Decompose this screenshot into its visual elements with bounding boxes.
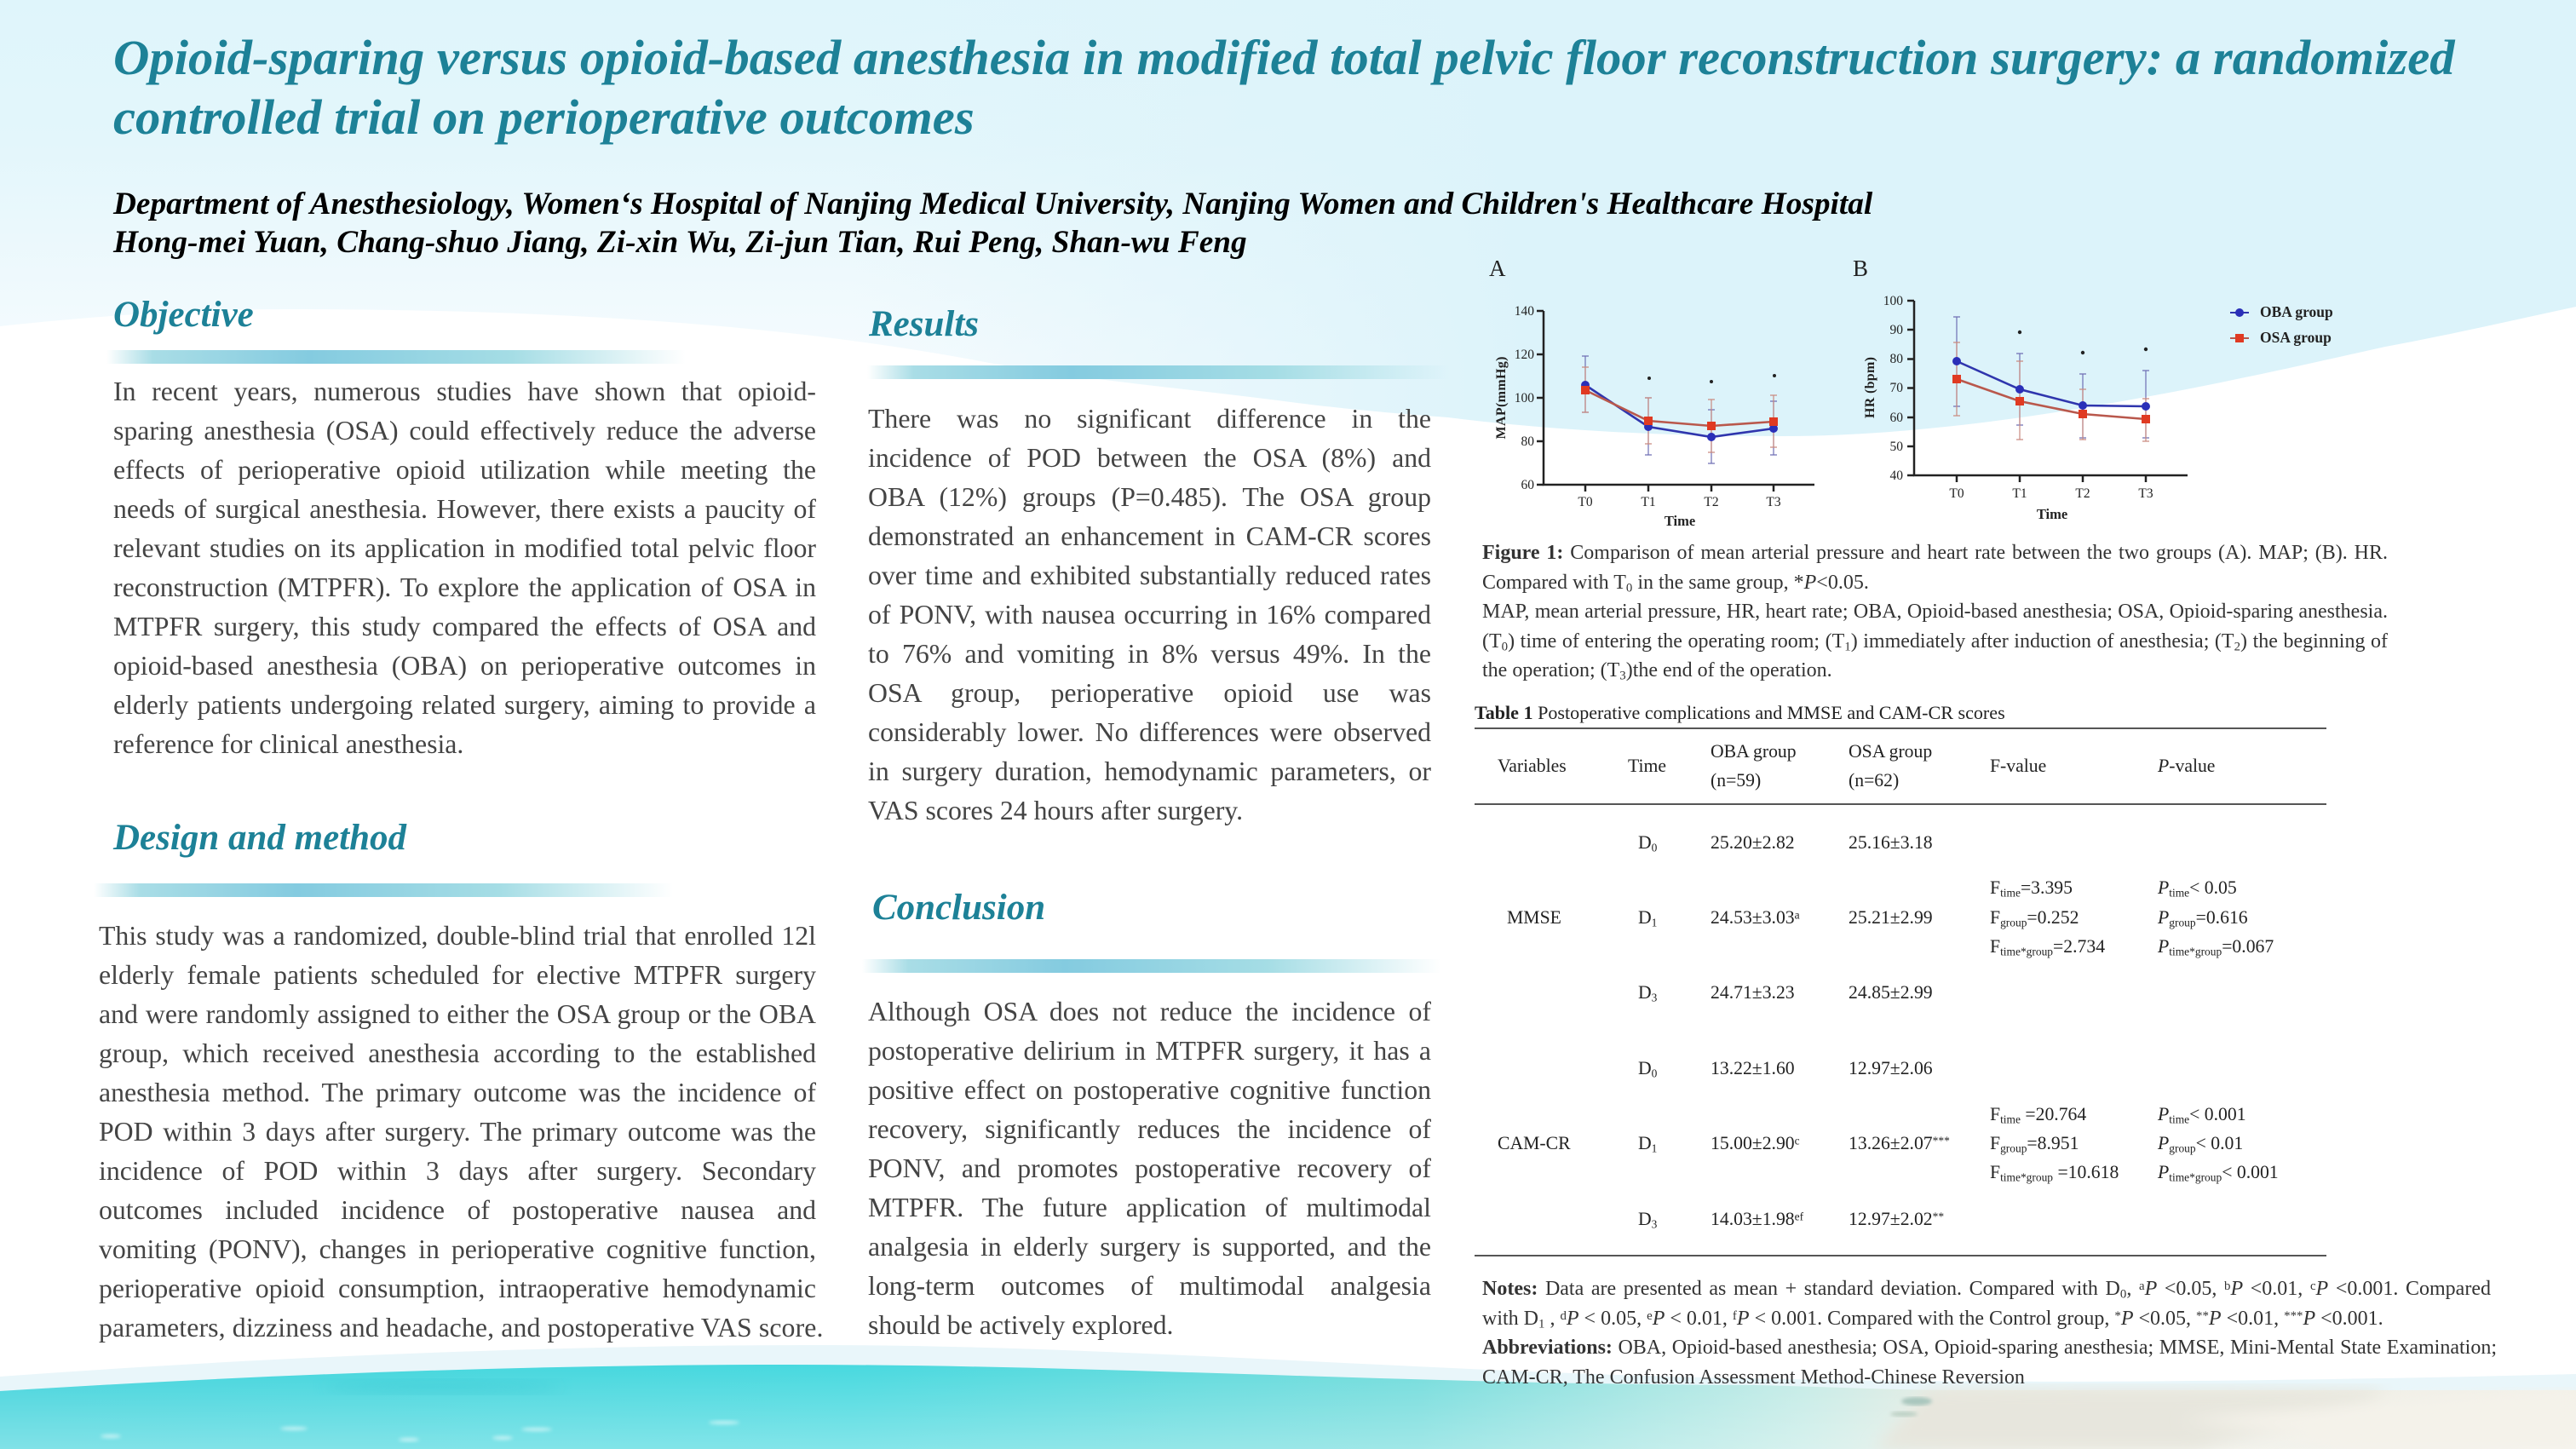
chart A: MAP: 100 bbox=[1515, 391, 1534, 405]
chart B: HR: 90 bbox=[1889, 323, 1903, 337]
table notes: Notes: Data are presented as mean + standard deviation. Compared with D0, aP <0.05, bP <0.01, cP <0.001. Compared bbox=[1482, 1278, 2491, 1302]
chart B: HR: 70 bbox=[1889, 381, 1903, 395]
authors and affiliation bbox=[112, 187, 1872, 260]
text: results: incidence of POD between the OSA (8%) and bbox=[868, 443, 1431, 473]
table 1: MMSE and CAM-CR scores: 25.20±2.82 bbox=[1711, 832, 1795, 853]
chart A: MAP: T2 bbox=[1704, 495, 1719, 509]
text: conclusion: PONV, and promotes postoperative recovery of bbox=[868, 1153, 1431, 1183]
text: conclusion: positive effect on postoperative cognitive function bbox=[868, 1075, 1431, 1105]
text: results: There was no significant difference in the bbox=[868, 404, 1431, 434]
table 1: MMSE and CAM-CR scores: 24.53±3.03a bbox=[1711, 907, 1800, 928]
figure caption: Compared with T0 in the same group, *P<0.05. bbox=[1482, 572, 1869, 595]
table 1: MMSE and CAM-CR scores: Table 1 Postoperative complications and MMSE and CAM-CR scores bbox=[1475, 702, 2005, 723]
text: design and method: POD within 3 days after surgery. The primary outcome was the bbox=[99, 1117, 816, 1147]
figure caption: Figure 1: Comparison of mean arterial pressure and heart rate between the two groups (A). MAP; (B). HR. bbox=[1482, 542, 2388, 564]
figure 1: MAP and HR line charts bbox=[1489, 256, 2333, 529]
chart A: MAP: T1 bbox=[1641, 495, 1656, 509]
chart B: HR: T1 bbox=[2012, 486, 2027, 501]
table 1: MMSE and CAM-CR scores: 12.97±2.06 bbox=[1849, 1058, 1933, 1078]
authors and affiliation: Department of Anesthesiology, Women‘s Hospital of Nanjing Medical University, Nanjing Women and Children's Healthcare Hospital bbox=[113, 187, 1872, 221]
title: Opioid-sparing versus opioid-based anesthesia in modified total pelvic floor reconstruction surgery: a randomized bbox=[113, 30, 2455, 85]
text: objective: MTPFR surgery, this study compared the effects of OSA and bbox=[113, 612, 816, 641]
chart A: MAP: 60 bbox=[1521, 478, 1534, 492]
text: objective: sparing anesthesia (OSA) could effectively reduce the adverse bbox=[113, 416, 816, 446]
text: conclusion: should be actively explored. bbox=[868, 1310, 1174, 1340]
title bbox=[113, 30, 2455, 145]
text: conclusion: Although OSA does not reduce the incidence of bbox=[868, 997, 1431, 1026]
table 1: MMSE and CAM-CR scores: Fgroup=0.252 bbox=[1990, 907, 2079, 929]
text: design and method: group, which received anesthesia according to the established bbox=[99, 1038, 816, 1068]
authors and affiliation: Hong-mei Yuan, Chang-shuo Jiang, Zi-xin Wu, Zi-jun Tian, Rui Peng, Shan-wu Feng bbox=[113, 225, 1247, 260]
text: objective: elderly patients undergoing related surgery, aiming to provide a bbox=[113, 690, 816, 720]
text: design and method: parameters, dizziness and headache, and postoperative VAS score. bbox=[99, 1313, 824, 1343]
chart A: MAP: 140 bbox=[1515, 304, 1534, 319]
table 1: MMSE and CAM-CR scores: 13.26±2.07*** bbox=[1849, 1133, 1950, 1153]
figure caption: MAP, mean arterial pressure, HR, heart rate; OBA, Opioid-based anesthesia; OSA, Opioid-sparing anesthesia. bbox=[1482, 601, 2388, 623]
table notes: Abbreviations: OBA, Opioid-based anesthesia; OSA, Opioid-sparing anesthesia; MMSE, Mini-Mental State Examination; bbox=[1482, 1337, 2497, 1359]
heading: Results: Results bbox=[869, 304, 979, 344]
text: results: OBA (12%) groups (P=0.485). The OSA group bbox=[868, 482, 1431, 512]
text: conclusion: analgesia in elderly surgery is supported, and the bbox=[868, 1232, 1431, 1262]
table 1: MMSE and CAM-CR scores: Ftime =20.764 bbox=[1990, 1104, 2086, 1125]
text: design and method: vomiting (PONV), changes in perioperative cognitive function, bbox=[99, 1234, 816, 1264]
text: objective: relevant studies on its application in modified total pelvic floor bbox=[113, 533, 816, 563]
table 1: MMSE and CAM-CR scores: Ptime*group=0.067 bbox=[2158, 936, 2274, 957]
chart B: HR: T3 bbox=[2138, 486, 2153, 501]
text: conclusion: MTPFR. The future application of multimodal bbox=[868, 1193, 1431, 1222]
text: objective: effects of perioperative opioid utilization while meeting the bbox=[113, 455, 816, 485]
table 1: MMSE and CAM-CR scores: 25.16±3.18 bbox=[1849, 832, 1933, 853]
table 1: MMSE and CAM-CR scores: P-value bbox=[2158, 756, 2215, 776]
table 1: MMSE and CAM-CR scores: (n=59) bbox=[1711, 770, 1761, 791]
text: design and method: This study was a randomized, double-blind trial that enrolled 12l bbox=[99, 921, 816, 951]
chart B: HR: 40 bbox=[1889, 469, 1903, 483]
text: design and method: outcomes included incidence of postoperative nausea and bbox=[99, 1195, 816, 1225]
table 1: MMSE and CAM-CR scores: D0 bbox=[1638, 1058, 1657, 1079]
chart B: HR: 50 bbox=[1889, 440, 1903, 454]
table 1: MMSE and CAM-CR scores: Variables bbox=[1498, 756, 1567, 776]
table 1: MMSE and CAM-CR scores: 12.97±2.02** bbox=[1849, 1209, 1944, 1229]
chart legend: OSA group bbox=[2260, 329, 2332, 346]
table 1: MMSE and CAM-CR scores: Time bbox=[1628, 756, 1666, 776]
chart A: MAP: 120 bbox=[1515, 348, 1534, 362]
chart B: HR bbox=[1853, 256, 2188, 522]
chart A: MAP: T3 bbox=[1766, 495, 1781, 509]
table 1: MMSE and CAM-CR scores: D1 bbox=[1638, 1133, 1657, 1154]
text: objective: needs of surgical anesthesia. However, there exists a paucity of bbox=[113, 494, 816, 524]
chart B: HR: Time bbox=[2037, 506, 2067, 522]
text: results: to 76% and vomiting in 8% versus 49%. In the bbox=[868, 639, 1431, 669]
heading: Conclusion: Conclusion bbox=[872, 888, 1045, 928]
table 1: MMSE and CAM-CR scores: 14.03±1.98ef bbox=[1711, 1209, 1803, 1229]
table 1: MMSE and CAM-CR scores bbox=[1475, 702, 2326, 1256]
text: objective: reference for clinical anesthesia. bbox=[113, 729, 463, 759]
chart A: MAP bbox=[1489, 256, 1814, 529]
table 1: MMSE and CAM-CR scores: Ptime< 0.001 bbox=[2158, 1104, 2246, 1125]
text: conclusion: long-term outcomes of multimodal analgesia bbox=[868, 1271, 1431, 1301]
sand bbox=[1874, 1389, 2385, 1449]
text: conclusion bbox=[868, 997, 1431, 1340]
table 1: MMSE and CAM-CR scores: Ptime< 0.05 bbox=[2158, 877, 2237, 899]
table 1: MMSE and CAM-CR scores: Pgroup=0.616 bbox=[2158, 907, 2248, 929]
text: results: in surgery duration, hemodynamic parameters, or bbox=[868, 756, 1431, 786]
table 1: MMSE and CAM-CR scores: OBA group bbox=[1711, 741, 1797, 762]
text: design and method bbox=[99, 921, 824, 1343]
text: design and method: and were randomly assigned to either the OSA group or the OBA bbox=[99, 999, 816, 1029]
chart A: MAP: MAP(mmHg) bbox=[1494, 356, 1509, 440]
chart legend: OBA group bbox=[2260, 303, 2333, 320]
text: conclusion: postoperative delirium in MTPFR surgery, it has a bbox=[868, 1036, 1431, 1066]
chart legend bbox=[2230, 303, 2333, 346]
table 1: MMSE and CAM-CR scores: D3 bbox=[1638, 982, 1657, 1003]
text: design and method: anesthesia method. The primary outcome was the incidence of bbox=[99, 1078, 816, 1107]
table 1: MMSE and CAM-CR scores: 15.00±2.90c bbox=[1711, 1133, 1800, 1153]
table 1: MMSE and CAM-CR scores: Ftime=3.395 bbox=[1990, 877, 2073, 899]
chart A: MAP: T0 bbox=[1578, 495, 1593, 509]
table 1: MMSE and CAM-CR scores: D1 bbox=[1638, 907, 1657, 929]
chart B: HR: 100 bbox=[1883, 294, 1903, 308]
text: results: of PONV, with nausea occurring in 16% compared bbox=[868, 600, 1431, 630]
table 1: MMSE and CAM-CR scores: D3 bbox=[1638, 1209, 1657, 1230]
chart B: HR: 60 bbox=[1889, 411, 1903, 425]
figure caption: (T0) time of entering the operating room; (T1) immediately after induction of anesthesia; (T2) the beginning of bbox=[1482, 630, 2388, 654]
chart B: HR: T0 bbox=[1949, 486, 1964, 501]
text: results: VAS scores 24 hours after surgery. bbox=[868, 796, 1243, 825]
table 1: MMSE and CAM-CR scores: Ftime*group =10.618 bbox=[1990, 1162, 2119, 1183]
table 1: MMSE and CAM-CR scores: Pgroup< 0.01 bbox=[2158, 1133, 2243, 1154]
table notes bbox=[1482, 1278, 2497, 1389]
table 1: MMSE and CAM-CR scores: D0 bbox=[1638, 832, 1657, 854]
table notes: CAM-CR, The Confusion Assessment Method-Chinese Reversion bbox=[1482, 1366, 2025, 1389]
table 1: MMSE and CAM-CR scores: (n=62) bbox=[1849, 770, 1899, 791]
text: objective bbox=[113, 377, 816, 759]
table 1: MMSE and CAM-CR scores: Fgroup=8.951 bbox=[1990, 1133, 2079, 1154]
title: controlled trial on perioperative outcomes bbox=[113, 89, 975, 145]
text: results: over time and exhibited substantially reduced rates bbox=[868, 561, 1431, 590]
text: results: demonstrated an enhancement in CAM-CR scores bbox=[868, 521, 1431, 551]
table 1: MMSE and CAM-CR scores: Ftime*group=2.734 bbox=[1990, 936, 2105, 957]
heading: Design and method: Design and method bbox=[113, 818, 406, 858]
table 1: MMSE and CAM-CR scores: OSA group bbox=[1849, 741, 1932, 762]
light wave bbox=[0, 1345, 2576, 1449]
chart A: MAP: 80 bbox=[1521, 434, 1534, 449]
figure caption bbox=[1482, 542, 2388, 683]
table 1: MMSE and CAM-CR scores: 25.21±2.99 bbox=[1849, 907, 1933, 928]
text: results bbox=[868, 404, 1431, 825]
chart A: MAP: A bbox=[1489, 256, 1506, 281]
text: design and method: incidence of POD within 3 days after surgery. Secondary bbox=[99, 1156, 816, 1186]
sea bbox=[0, 1365, 2576, 1449]
chart B: HR: HR (bpm) bbox=[1863, 357, 1877, 418]
table 1: MMSE and CAM-CR scores: F-value bbox=[1990, 756, 2046, 776]
text: design and method: elderly female patients scheduled for elective MTPFR surgery bbox=[99, 960, 816, 990]
chart B: HR: B bbox=[1853, 256, 1868, 281]
text: objective: reconstruction (MTPFR). To explore the application of OSA in bbox=[113, 572, 816, 602]
table 1: MMSE and CAM-CR scores: Ptime*group< 0.001 bbox=[2158, 1162, 2279, 1183]
text: design and method: perioperative opioid consumption, intraoperative hemodynamic bbox=[99, 1274, 816, 1303]
text: results: considerably lower. No differences were observed bbox=[868, 717, 1431, 747]
figure caption: the operation; (T3)the end of the operation. bbox=[1482, 659, 1832, 683]
table 1: MMSE and CAM-CR scores: 13.22±1.60 bbox=[1711, 1058, 1795, 1078]
text: conclusion: recovery, significantly reduces the incidence of bbox=[868, 1114, 1431, 1144]
text: objective: In recent years, numerous studies have shown that opioid- bbox=[113, 377, 816, 406]
table 1: MMSE and CAM-CR scores: CAM-CR bbox=[1498, 1133, 1571, 1153]
text: results: OSA group, perioperative opioid use was bbox=[868, 678, 1431, 708]
table 1: MMSE and CAM-CR scores: 24.85±2.99 bbox=[1849, 982, 1933, 1003]
chart B: HR: 80 bbox=[1889, 352, 1903, 366]
text: objective: opioid-based anesthesia (OBA) on perioperative outcomes in bbox=[113, 651, 816, 681]
table 1: MMSE and CAM-CR scores: 24.71±3.23 bbox=[1711, 982, 1795, 1003]
chart B: HR: T2 bbox=[2075, 486, 2090, 501]
table 1: MMSE and CAM-CR scores: MMSE bbox=[1507, 907, 1561, 928]
chart A: MAP: Time bbox=[1665, 513, 1695, 529]
heading: Objective: Objective bbox=[113, 295, 254, 335]
table notes: with D1 , dP < 0.05, eP < 0.01, fP < 0.001. Compared with the Control group, *P <0.05, **P <0.01, ***P <0.001. bbox=[1482, 1308, 2383, 1331]
